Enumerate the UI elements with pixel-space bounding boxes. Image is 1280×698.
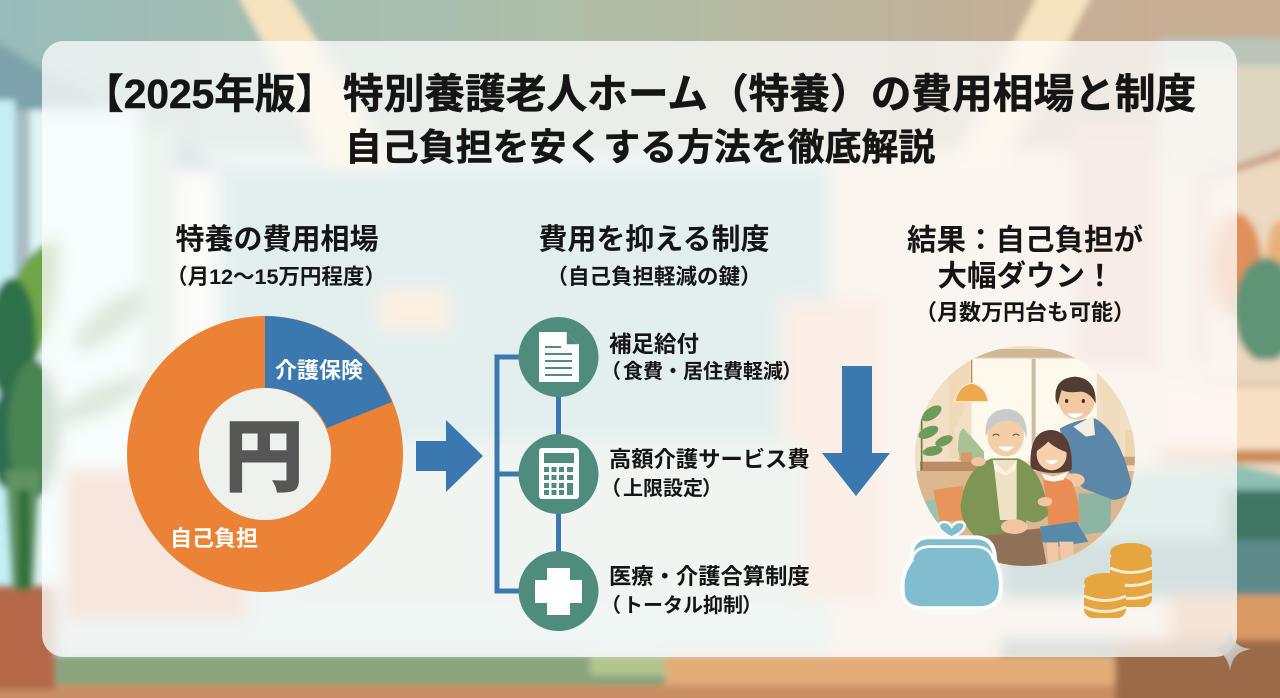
- donut centre: yen symbol: 円: [225, 413, 303, 501]
- item text: combined system: 医療・介護合算制度: [609, 564, 810, 589]
- title: [83, 71, 1196, 168]
- icon: calculator: [518, 434, 598, 514]
- title: 自己負担を安くする方法を徹底解説: [345, 127, 935, 168]
- column heading: cost: [166, 223, 386, 289]
- item text: combined system: （: [601, 594, 621, 617]
- icon: document: [518, 317, 598, 397]
- arrow: right: [416, 420, 483, 492]
- column heading: cost: （月12〜15万円程度）: [166, 265, 386, 289]
- column heading: result: 大幅ダウン！: [937, 259, 1115, 293]
- item text: high-cost care: （: [601, 477, 621, 500]
- grandmother: [982, 528, 1046, 566]
- icon: medical cross: [518, 551, 598, 631]
- sparkle mark: [1208, 627, 1252, 671]
- title: 特別養護老人ホーム（特養）の費用相場と制度: [343, 71, 1196, 117]
- item text: high-cost care: 高額介護サービス費: [609, 447, 810, 472]
- donut label: long-term care insurance: 介護保険: [275, 358, 363, 383]
- floor: [0, 655, 1280, 698]
- item text: supplementary benefit: ）: [782, 360, 802, 383]
- donut label: self pay: 自己負担: [170, 526, 258, 551]
- item text: combined system: ）: [742, 594, 762, 617]
- girl: [1030, 430, 1072, 473]
- icon: coins: [1084, 543, 1152, 618]
- item text: combined system: [601, 564, 810, 617]
- icon: coin purse: [903, 522, 1001, 608]
- arrow: down: [822, 366, 890, 496]
- item text: high-cost care: [601, 447, 810, 500]
- column heading: systems: （自己負担軽減の鍵）: [546, 265, 762, 289]
- column heading: result: [907, 223, 1143, 325]
- column heading: systems: 費用を抑える制度: [538, 223, 770, 256]
- item text: high-cost care: 上限設定: [623, 477, 703, 500]
- item text: supplementary benefit: 食費・居住費軽減: [623, 359, 783, 383]
- donut chart: [163, 316, 392, 556]
- item text: high-cost care: ）: [702, 477, 722, 500]
- column heading: result: 結果：自己負担が: [907, 223, 1143, 257]
- column heading: systems: [538, 223, 770, 289]
- connector lines: [497, 357, 558, 591]
- column heading: result: （月数万円台も可能）: [915, 300, 1135, 325]
- item text: supplementary benefit: 補足給付: [609, 332, 699, 357]
- title: 【2025年版】: [83, 71, 336, 117]
- illustration: family: [913, 345, 1140, 571]
- item text: supplementary benefit: （: [601, 360, 621, 383]
- column heading: cost: 特養の費用相場: [175, 223, 379, 256]
- plant: [0, 240, 155, 590]
- right wall strip: [1160, 38, 1280, 68]
- item text: combined system: トータル抑制: [623, 594, 743, 617]
- item text: supplementary benefit: [601, 332, 802, 383]
- man: [1060, 418, 1132, 500]
